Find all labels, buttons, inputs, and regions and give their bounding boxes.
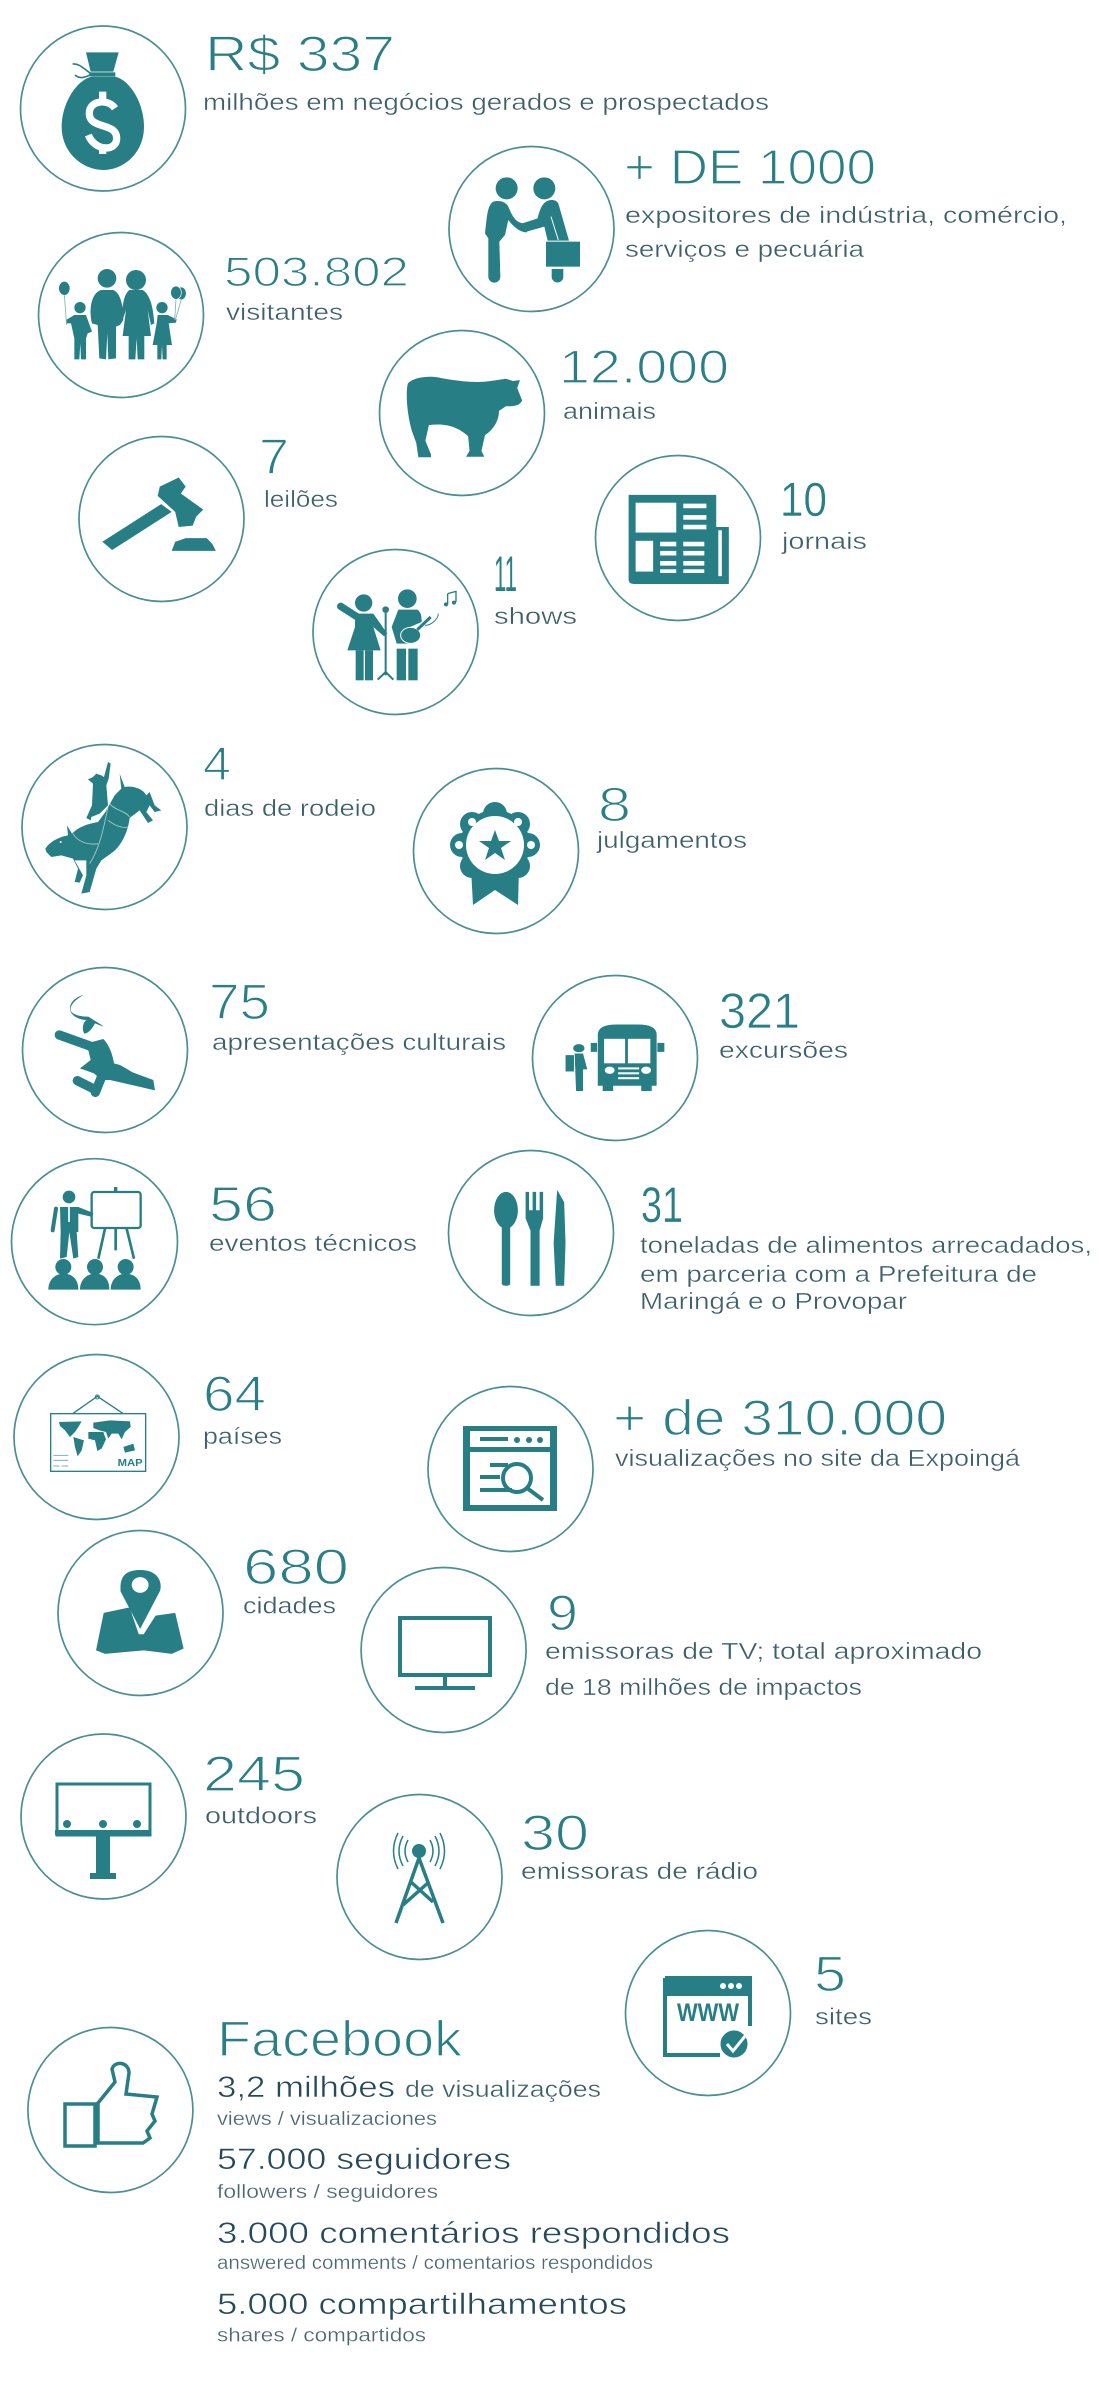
caption: jornais [781, 528, 867, 554]
translation: answered comments / comentarios respondidos [217, 2253, 653, 2274]
number: 75 [209, 974, 270, 1030]
icon: cow [407, 377, 522, 457]
icon: money bag [62, 52, 144, 170]
metric: views: 3,2 milhões [217, 2071, 395, 2104]
icon: radio tower [394, 1833, 444, 1923]
caption: outdoors [205, 1802, 317, 1828]
number: 680 [243, 1539, 349, 1595]
metric: shares: 5.000 compartilhamentos [217, 2288, 627, 2321]
icon: school bus and child [566, 1025, 664, 1091]
icon: dancer [59, 995, 155, 1092]
caption line 1: toneladas de alimentos arrecadados, [640, 1232, 1092, 1258]
stat: more than 310.000 site views [428, 1386, 1020, 1552]
stat: 8 judgings [414, 768, 747, 934]
icon: hanging world map: MAP [118, 1458, 143, 1469]
stat: 9 TV stations [361, 1568, 982, 1732]
caption line 3: Maringá e o Provopar [640, 1288, 907, 1314]
stat: 75 cultural performances [22, 968, 506, 1132]
number: 8 [598, 779, 631, 832]
number: + de 310.000 [613, 1390, 947, 1446]
icon: www window with check [664, 1977, 751, 2059]
icon: family with balloons [59, 269, 186, 359]
caption line 2: de 18 milhões de impactos [545, 1674, 862, 1700]
number: 56 [209, 1178, 277, 1232]
translation: followers / seguidores [217, 2182, 438, 2203]
icon: www window with check: WWW [677, 1999, 739, 2027]
stat: 11 shows [313, 546, 577, 714]
caption: visitantes [226, 299, 343, 325]
caption line 2: em parceria com a Prefeitura de [640, 1261, 1037, 1287]
number: 503.802 [224, 248, 409, 295]
number: 4 [203, 737, 231, 790]
caption: excursões [719, 1037, 848, 1063]
caption line 2: serviços e pecuária [625, 236, 864, 262]
caption: shows [494, 603, 577, 629]
stat: 5 sites [626, 1930, 872, 2096]
heading: Facebook [217, 2011, 463, 2067]
number: 321 [719, 983, 800, 1039]
number: 12.000 [559, 340, 729, 393]
panel: Facebook stats [28, 2011, 730, 2346]
stat: 11 shows: 11 [494, 546, 517, 602]
stat: 7 auctions [79, 429, 338, 602]
metric unit: de visualizações [405, 2076, 601, 2102]
stat: 4 rodeo days [22, 737, 376, 910]
number: 10 [780, 474, 827, 527]
icon: browser window with magnifier [463, 1426, 557, 1511]
caption: visualizações no site da Expoingá [615, 1445, 1020, 1471]
icon: award rosette [450, 802, 540, 905]
stat: 56 technical events [12, 1159, 417, 1325]
translation: views / visualizaciones [217, 2109, 437, 2130]
caption: emissoras de rádio [521, 1858, 758, 1884]
number: 64 [203, 1366, 266, 1422]
stat: 680 cities [58, 1530, 349, 1696]
stat: 503.802 visitors [38, 232, 409, 398]
number: 31 [641, 1177, 683, 1233]
icon: billboard [55, 1784, 151, 1879]
icon: handshake [485, 177, 580, 283]
caption: apresentações culturais [212, 1029, 506, 1055]
icon: bull rider [45, 762, 161, 894]
stat: 30 radio stations [337, 1794, 758, 1960]
translation: shares / compartidos [217, 2326, 426, 2346]
caption: eventos técnicos [209, 1230, 417, 1256]
icon: map pin [96, 1570, 184, 1654]
stat: 245 billboards [21, 1734, 317, 1899]
number: R$ 337 [205, 26, 395, 82]
stat: 64 countries [14, 1354, 282, 1520]
caption: animais [563, 398, 656, 424]
icon: thumbs up [65, 2063, 157, 2146]
number: 30 [521, 1805, 589, 1861]
caption: dias de rodeio [204, 795, 376, 821]
metric: followers: 57.000 seguidores [217, 2143, 511, 2176]
icon: hanging world map [51, 1395, 146, 1471]
caption: milhões em negócios gerados e prospectados [203, 89, 769, 115]
caption: cidades [243, 1592, 336, 1618]
number: 245 [203, 1746, 305, 1802]
number: 7 [259, 429, 289, 485]
icon: newspaper [629, 495, 729, 584]
caption: leilões [264, 486, 338, 512]
number: 9 [547, 1585, 578, 1641]
caption line 1: emissoras de TV; total aproximado [545, 1638, 982, 1664]
icon: gavel [102, 477, 216, 551]
stat: 10 newspapers [596, 456, 867, 620]
caption: expositores de indústria, comércio, [625, 202, 1067, 228]
number: + DE 1000 [624, 141, 876, 195]
caption: países [203, 1423, 282, 1449]
stat: more than 1000 exhibitors [449, 141, 1067, 312]
caption: julgamentos [596, 827, 747, 853]
icon: spoon, fork and knife [494, 1190, 566, 1286]
stat: 321 excursions [532, 976, 848, 1140]
icon: television [400, 1618, 490, 1688]
metric: comments: 3.000 comentários respondidos [217, 2217, 730, 2250]
stat: 31 tons of food [448, 1150, 1092, 1316]
stat: R$ 337 million in business [20, 26, 769, 191]
icon: singer and guitarist [341, 589, 456, 680]
icon: presenter and audience [48, 1187, 141, 1290]
stat: 12.000 animals [380, 330, 729, 496]
caption: sites [815, 2004, 872, 2030]
number: 5 [814, 1946, 846, 2002]
